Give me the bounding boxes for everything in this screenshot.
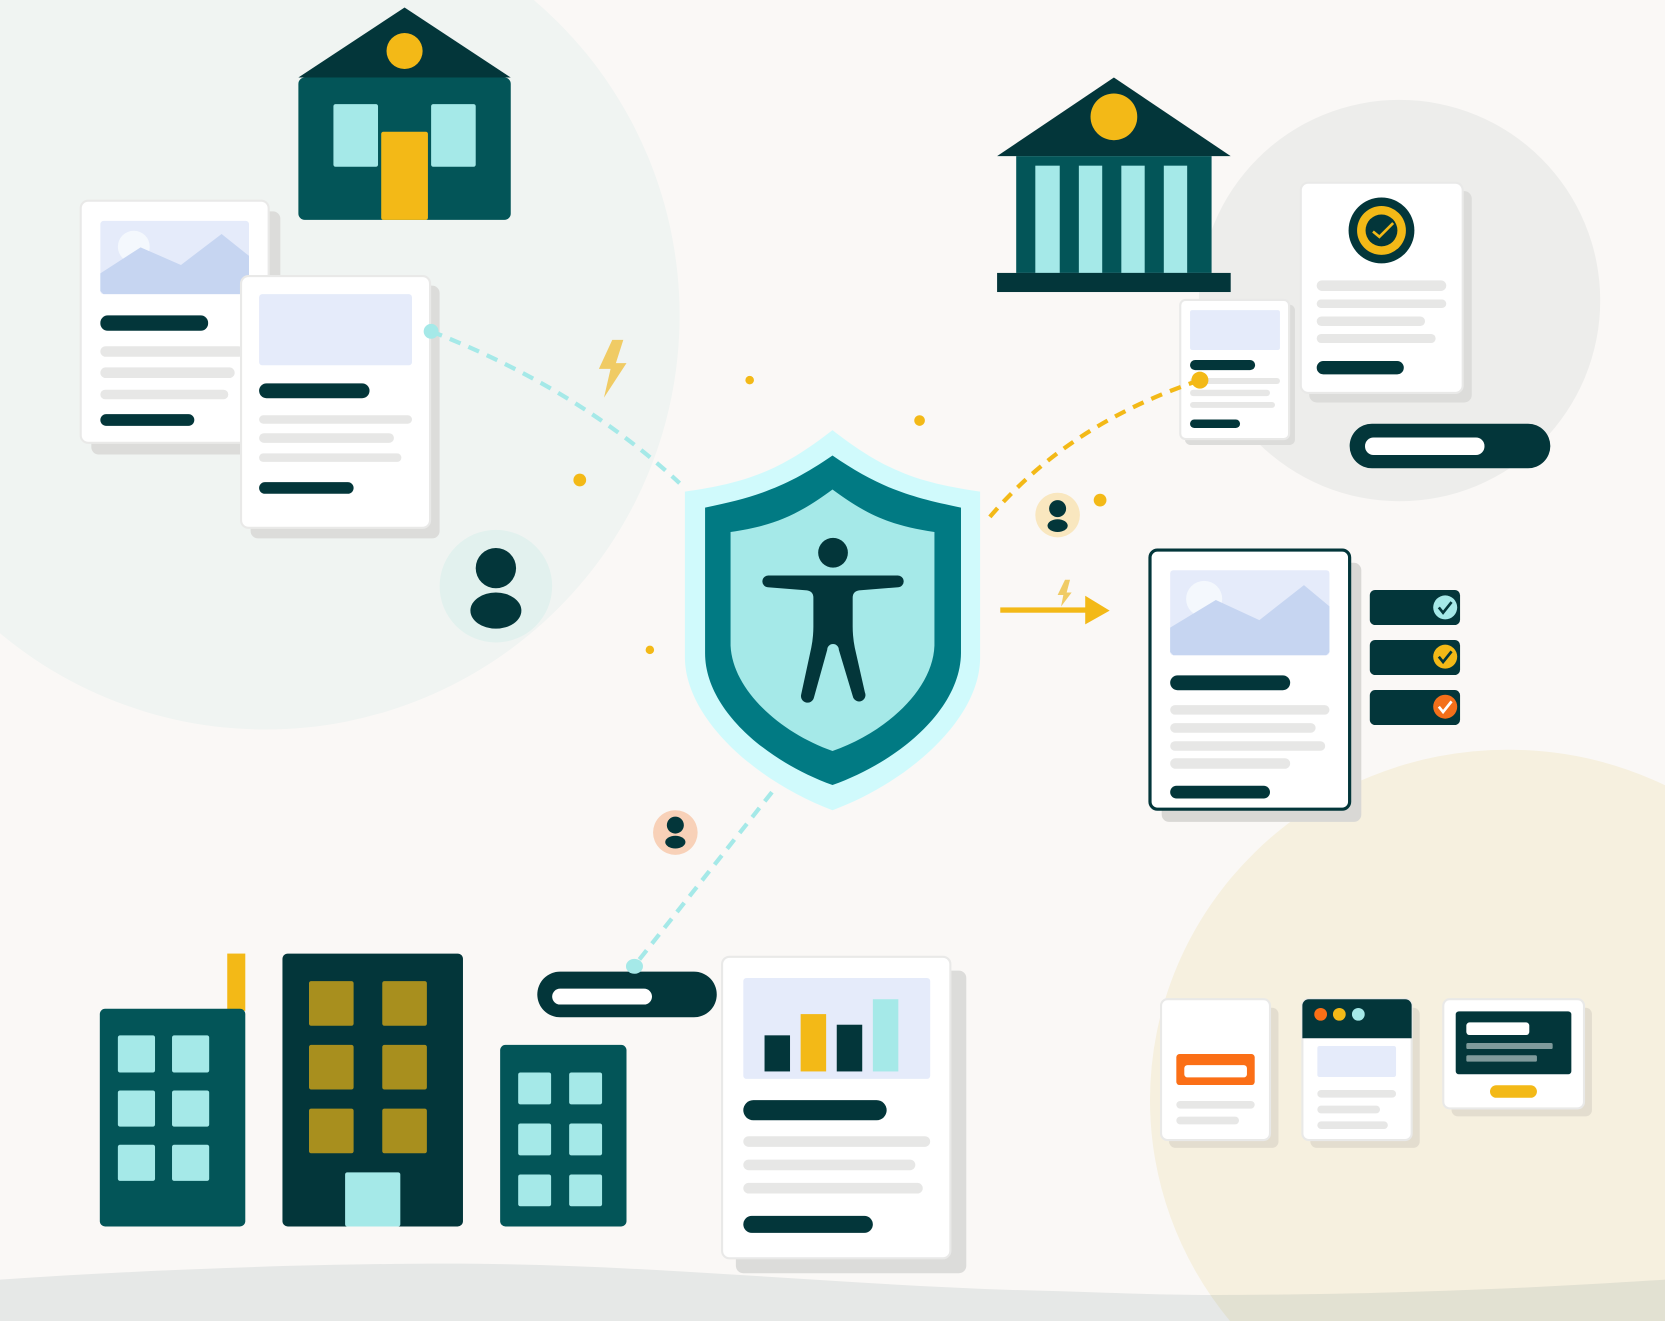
checklist: status tags: [1370, 590, 1460, 725]
document: text card, front: [241, 276, 440, 538]
document: small card: [1180, 300, 1295, 445]
building: small right office: [500, 1045, 626, 1226]
icon: accessibility person: [762, 538, 904, 703]
document: bar chart report: [722, 957, 966, 1273]
decorative dots: [573, 376, 1106, 654]
pill: dark label near buildings: [537, 972, 717, 1017]
pill: dark label: [1350, 424, 1550, 468]
card: browser window: [1302, 999, 1420, 1148]
connector: teal dashed line from shield to buildings: [626, 792, 772, 974]
building: house with gable roof: [298, 7, 511, 220]
icon: check badge: [1349, 198, 1414, 263]
building: tall center office: [282, 954, 463, 1226]
tag: teal check: [1370, 590, 1460, 625]
connector: yellow dashed line from small card to shield: [990, 372, 1208, 517]
document: certificate card with badge: [1301, 183, 1472, 402]
card: orange button card: [1161, 999, 1278, 1148]
tag: yellow check: [1370, 640, 1460, 675]
connector: teal dashed line from document to shield: [424, 324, 680, 483]
building: bank with columns: [997, 78, 1231, 292]
icon: person on peach disc: [653, 810, 698, 855]
building: left office with antenna: [100, 954, 245, 1226]
bar chart: [765, 999, 898, 1071]
tag: orange check: [1370, 690, 1460, 725]
icon: person on yellow disc: [1035, 493, 1080, 537]
arrow: yellow pointing to document: [1000, 596, 1110, 624]
icon: lightning bolt: [599, 340, 626, 398]
shield: accessibility figure: [685, 430, 980, 810]
document: image card, back: [81, 201, 280, 454]
document: outlined image card: [1150, 550, 1361, 822]
icon: person on teal disc: [440, 530, 552, 642]
card: dark banner card: [1443, 999, 1592, 1116]
icon: small lightning bolt: [1058, 580, 1072, 607]
